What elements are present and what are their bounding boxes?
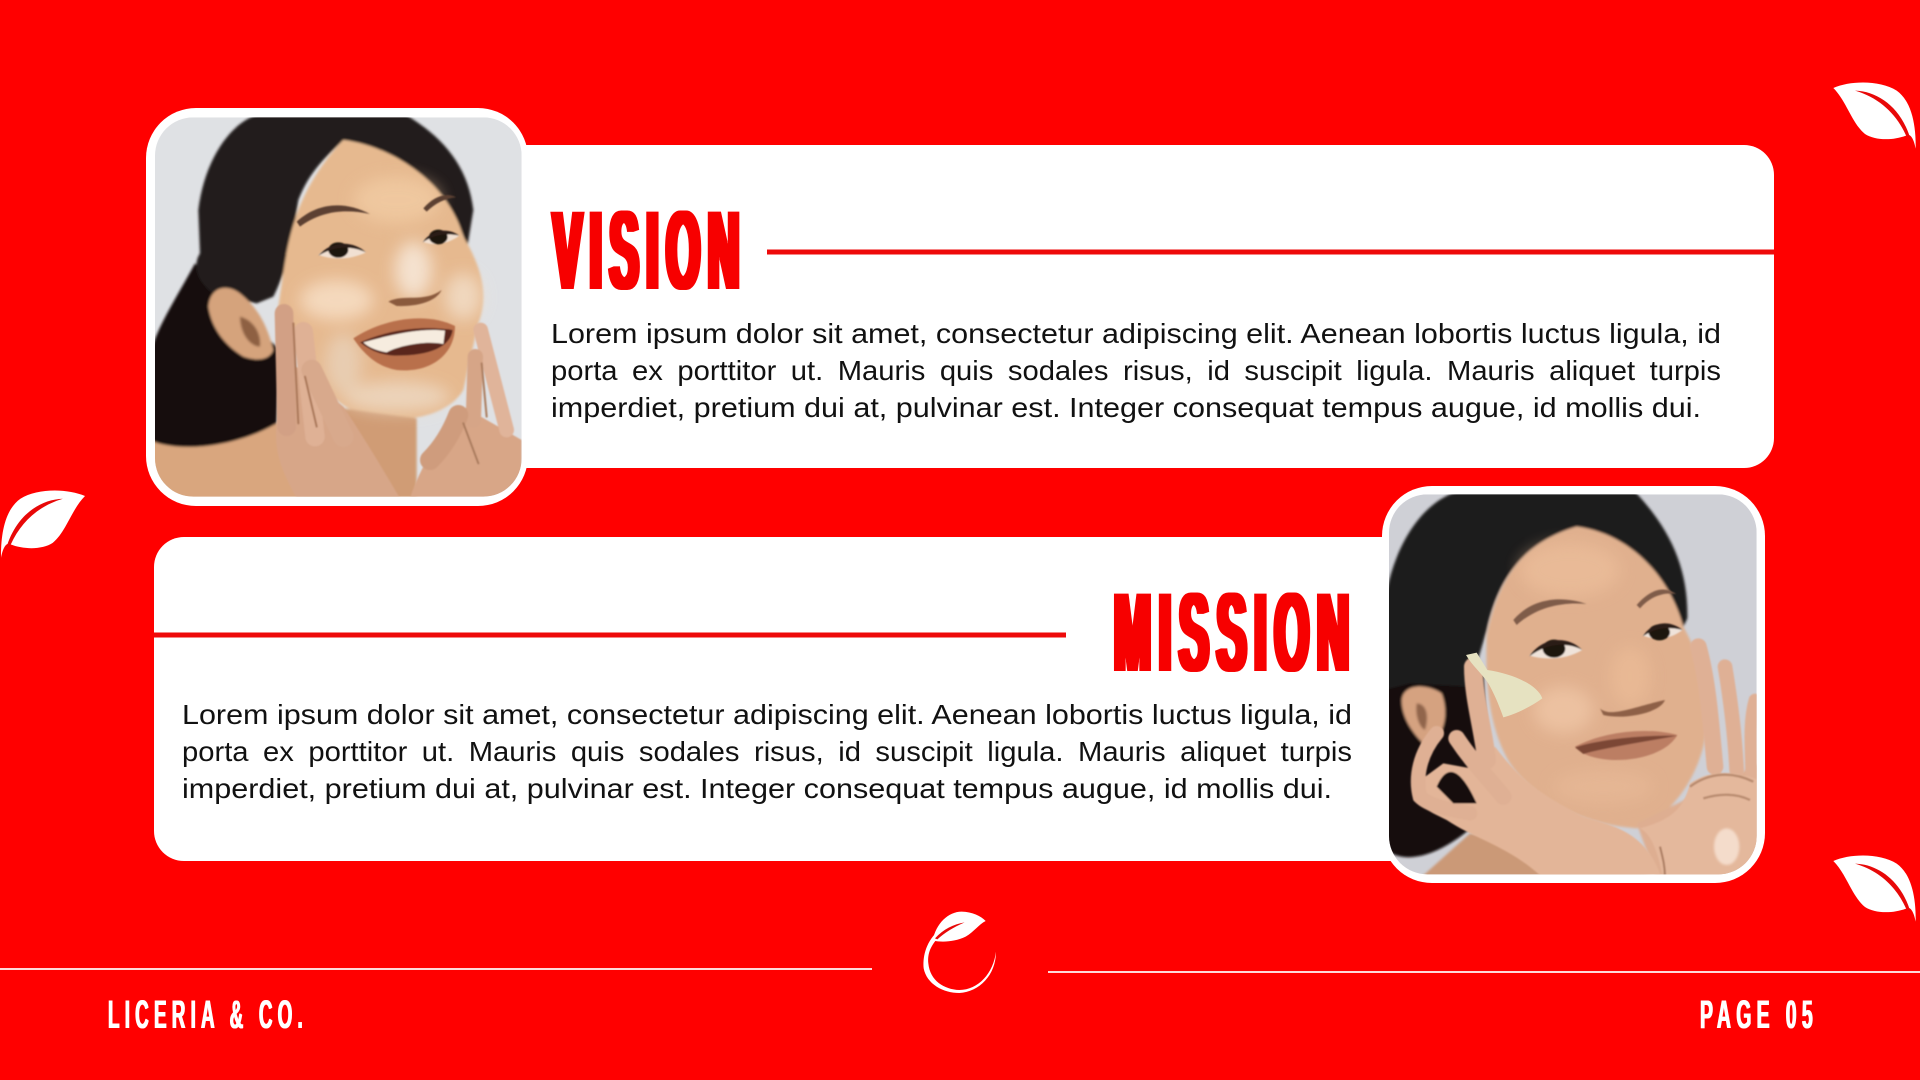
eyes [318,245,366,258]
mouth [1575,731,1677,760]
text block: vision body: porta ex porttitor ut. Mauris quis sodales risus, id suscipit ligula. Mauris aliquet turpis [551,355,1721,386]
panel: mission card [154,537,1454,861]
left hand [276,366,399,497]
text block: mission body [182,699,1352,804]
text block: mission body: Lorem ipsum dolor sit amet, consectetur adipiscing elit. Aenean lobortis luctus ligula, id [182,699,1352,730]
photo: woman with facial foam [146,108,528,506]
footer rule left [0,968,872,970]
panel: vision card: VISION [553,188,747,313]
divider: vision rule [767,250,1774,254]
left hand [1412,747,1662,878]
text block: mission body: porta ex porttitor ut. Mauris quis sodales risus, id suscipit ligula. Mauris aliquet turpis [182,736,1352,767]
text: LICERIA & CO. [108,993,308,1037]
eyes [1529,641,1582,659]
text block: vision body [551,318,1721,423]
text block: vision body: Lorem ipsum dolor sit amet, consectetur adipiscing elit. Aenean lobortis luctus ligula, id [551,318,1721,349]
panel: mission card: MISSION [1114,570,1357,695]
text block: mission body: imperdiet, pretium dui at, pulvinar est. Integer consequat tempus augue, id mollis dui. [182,773,1332,804]
mouth [353,318,455,370]
nose [1600,700,1665,717]
foam on face [300,177,482,412]
icon: leaf left [1,490,85,558]
photo: woman applying cream [1382,486,1765,883]
divider: mission rule [154,632,1066,638]
right hand [410,407,522,498]
icon: leaf bottom right [1833,856,1916,922]
brows [297,205,370,227]
footer rule right [1048,971,1920,973]
right hand [1698,647,1755,777]
nose [388,290,442,306]
brows [1513,599,1587,625]
text block: vision body: imperdiet, pretium dui at, pulvinar est. Integer consequat tempus augue, id mollis dui. [551,392,1701,423]
panel: vision card [300,145,1774,468]
cream [1466,653,1542,717]
icon: logo circle with leaf [923,912,996,993]
icon: leaf top right [1833,83,1916,149]
